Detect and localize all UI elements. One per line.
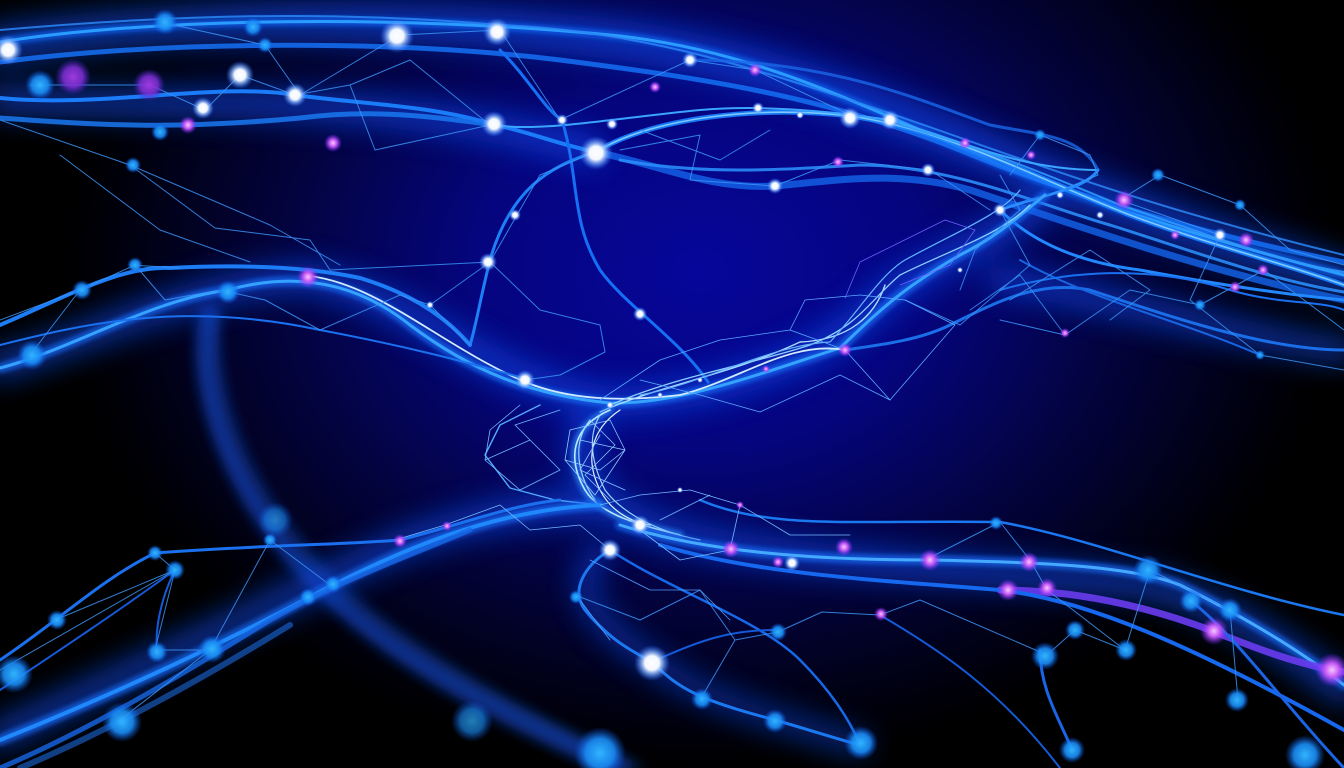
strand: faint out-of-focus arc [205, 310, 640, 768]
nodes: large white nodes [0, 18, 1227, 681]
strands: top bundle [0, 16, 1344, 382]
mesh: violet and fine polygon lines [395, 220, 975, 640]
strands: central twist [485, 405, 700, 540]
nodes: violet and pink nodes [55, 59, 1344, 687]
strands: lower right bundle [579, 500, 1344, 768]
strands: lower left bundle [0, 500, 600, 768]
strands: middle bundle [0, 190, 1344, 412]
